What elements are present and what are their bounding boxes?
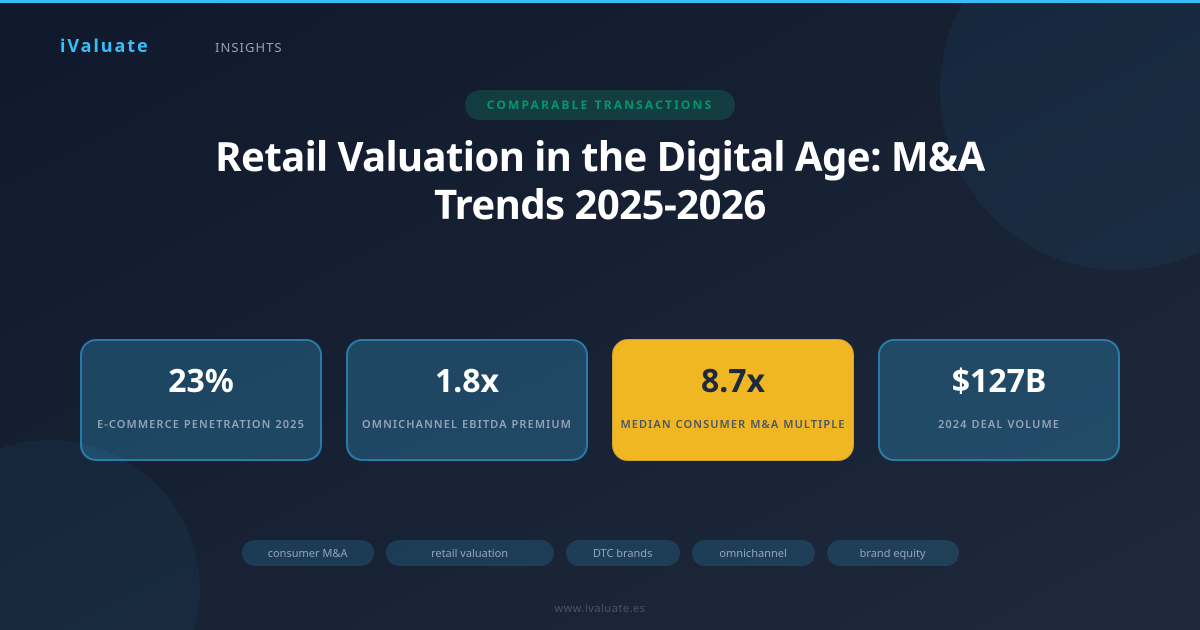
tag: brand equity — [827, 540, 959, 566]
tag: omnichannel: omnichannel — [719, 546, 787, 561]
section label: INSIGHTS — [215, 38, 283, 56]
category badge: COMPARABLE TRANSACTIONS — [487, 96, 713, 113]
stat card: deal volume: $127B — [952, 359, 1046, 402]
stat card: e-commerce penetration — [80, 339, 322, 461]
stat card: omnichannel premium — [346, 339, 588, 461]
tag: consumer M&A — [242, 540, 374, 566]
stat card: e-commerce penetration: E-COMMERCE PENETRATION 2025 — [97, 417, 305, 432]
logo: iValuate — [60, 34, 150, 58]
tag: retail valuation — [386, 540, 554, 566]
footer url: www.ivaluate.es — [555, 601, 645, 616]
tag: omnichannel — [692, 540, 815, 566]
stat card: omnichannel premium: 1.8x — [435, 359, 499, 402]
stat card: median multiple (highlighted) — [612, 339, 854, 461]
tag: DTC brands — [566, 540, 680, 566]
stat card: e-commerce penetration: 23% — [168, 359, 234, 402]
stat card: median multiple (highlighted): MEDIAN CONSUMER M&A MULTIPLE — [620, 417, 846, 432]
tag: consumer M&A: consumer M&A — [268, 546, 347, 561]
stat card: deal volume — [878, 339, 1120, 461]
tag: DTC brands: DTC brands — [593, 546, 652, 561]
tag: brand equity: brand equity — [860, 546, 926, 561]
stat card: median multiple (highlighted): 8.7x — [701, 359, 765, 402]
stat card: deal volume: 2024 DEAL VOLUME — [938, 417, 1060, 432]
title: Retail Valuation in the Digital Age: M&A Trends 2025-2026 — [215, 128, 985, 231]
tag: retail valuation: retail valuation — [431, 546, 508, 561]
category badge — [465, 90, 735, 120]
stat card: omnichannel premium: OMNICHANNEL EBITDA PREMIUM — [362, 417, 572, 432]
